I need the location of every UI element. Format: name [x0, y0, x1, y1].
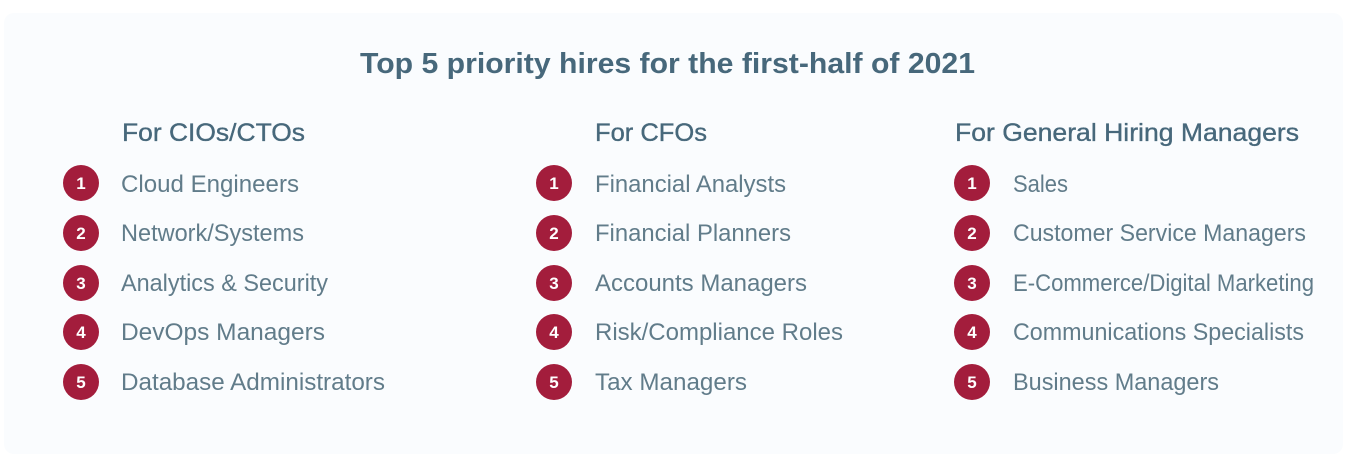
item 3: E-Commerce/Digital Marketing	[954, 265, 1314, 301]
item 4: Risk/Compliance Roles: 4	[549, 323, 559, 342]
title: Top 5 priority hires for the first-half of 2021	[360, 48, 975, 80]
item 3: Analytics & Security: 3	[76, 274, 86, 293]
item 2: Customer Service Managers: 2	[967, 224, 977, 243]
item 4: Risk/Compliance Roles	[536, 314, 843, 350]
item 3: Accounts Managers: 3	[549, 274, 559, 293]
item 4: Communications Specialists: 4	[967, 323, 977, 342]
heading: For CIOs/CTOs: For CIOs/CTOs	[122, 119, 305, 147]
panel: For CIOs/CTOs	[63, 119, 385, 400]
item 4: DevOps Managers: 4	[76, 323, 86, 342]
item 2: Customer Service Managers: Customer Service Managers	[1013, 220, 1306, 247]
item 3: E-Commerce/Digital Marketing: 3	[967, 274, 977, 293]
item 2: Financial Planners: 2	[549, 224, 559, 243]
item 4: DevOps Managers: DevOps Managers	[121, 319, 325, 346]
item 1: Financial Analysts: Financial Analysts	[595, 171, 786, 198]
item 5: Tax Managers	[536, 364, 747, 400]
item 2: Network/Systems: Network/Systems	[121, 220, 304, 247]
item 4: DevOps Managers	[63, 314, 325, 350]
heading: For CFOs: For CFOs	[595, 119, 707, 147]
item 2: Network/Systems: 2	[76, 224, 86, 243]
item 5: Business Managers: 5	[967, 373, 977, 392]
item 2: Financial Planners	[536, 215, 791, 251]
item 1: Financial Analysts	[536, 165, 786, 201]
item 3: Accounts Managers	[536, 265, 807, 301]
item 1: Sales: 1	[967, 174, 977, 193]
item 5: Tax Managers: Tax Managers	[595, 369, 747, 396]
item 5: Database Administrators: 5	[76, 373, 86, 392]
item 5: Business Managers	[954, 364, 1219, 400]
panel: For General Hiring Managers	[954, 119, 1314, 400]
heading: For General Hiring Managers: For General Hiring Managers	[955, 119, 1299, 147]
item 5: Database Administrators	[63, 364, 385, 400]
item 3: Accounts Managers: Accounts Managers	[595, 270, 807, 297]
item 3: Analytics & Security: Analytics & Security	[121, 270, 328, 297]
item 4: Risk/Compliance Roles: Risk/Compliance Roles	[595, 319, 843, 346]
item 2: Customer Service Managers	[954, 215, 1306, 251]
item 1: Cloud Engineers: 1	[76, 174, 86, 193]
item 1: Sales	[954, 165, 1068, 201]
item 4: Communications Specialists: Communications Specialists	[1013, 319, 1304, 346]
item 5: Database Administrators: Database Administrators	[121, 369, 385, 396]
item 4: Communications Specialists	[954, 314, 1304, 350]
item 1: Cloud Engineers	[63, 165, 299, 201]
item 1: Financial Analysts: 1	[549, 174, 559, 193]
panel: For CFOs	[536, 119, 843, 400]
item 5: Business Managers: Business Managers	[1013, 369, 1219, 396]
item 1: Cloud Engineers: Cloud Engineers	[121, 171, 299, 198]
item 3: E-Commerce/Digital Marketing: E-Commerce/Digital Marketing	[1013, 270, 1314, 297]
item 1: Sales: Sales	[1013, 171, 1068, 198]
item 2: Network/Systems	[63, 215, 304, 251]
item 2: Financial Planners: Financial Planners	[595, 220, 791, 247]
item 3: Analytics & Security	[63, 265, 328, 301]
item 5: Tax Managers: 5	[549, 373, 559, 392]
